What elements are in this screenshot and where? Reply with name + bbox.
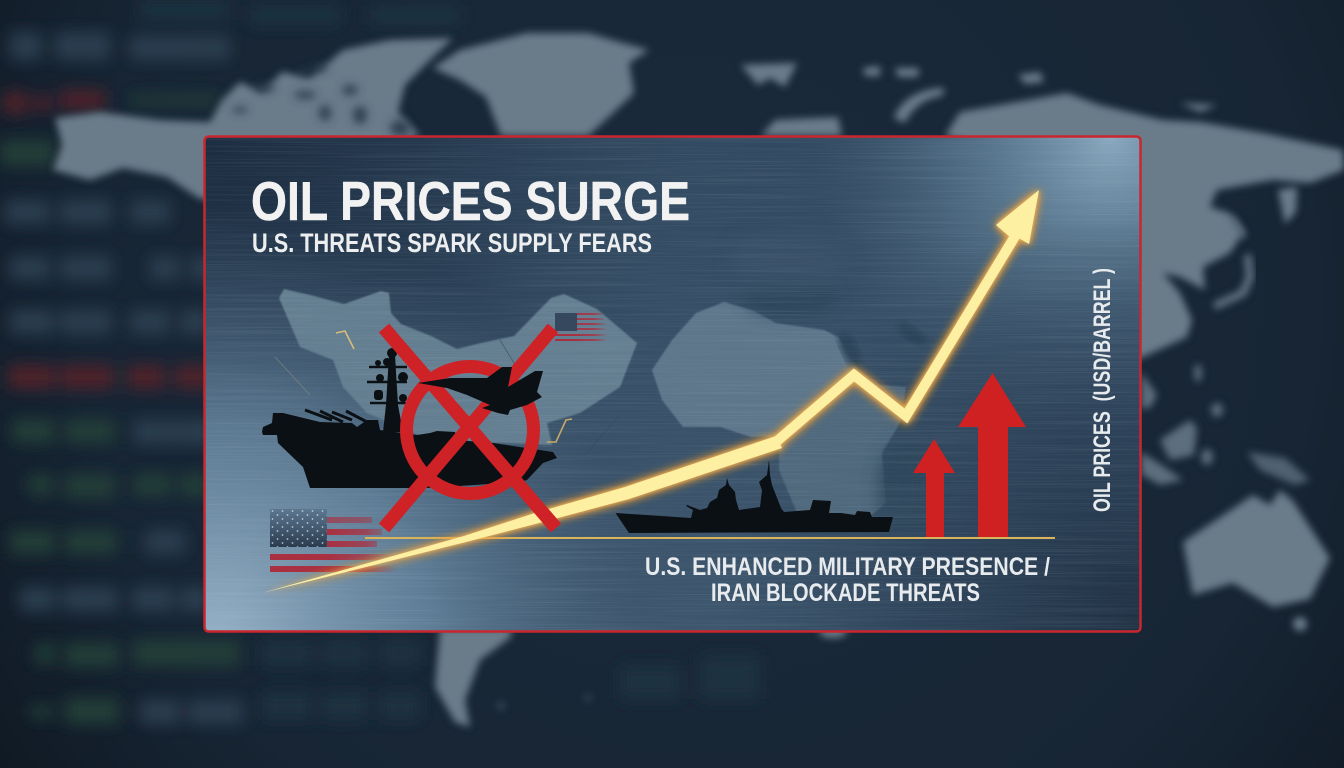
chart: oil price arrow line (262, 190, 1039, 593)
icon: small US flag (555, 313, 607, 341)
axis caption: U.S. ENHANCED MILITARY PRESENCE / (645, 553, 1050, 581)
land: thin blurred islands (1194, 220, 1250, 465)
land: Greenland (433, 33, 649, 136)
main panel (204, 136, 1141, 632)
land: North America (53, 38, 453, 200)
icon: large US flag (270, 509, 397, 572)
panel red border (204, 136, 1140, 632)
icon: warship silhouette (616, 460, 893, 533)
icon: aircraft carrier silhouette (262, 348, 557, 488)
land: South America tip (435, 628, 511, 727)
icon: small red up arrow (913, 439, 955, 537)
subtitle: U.S. THREATS SPARK SUPPLY FEARS (252, 228, 652, 258)
background: blurred stock ticker table (0, 0, 760, 724)
axis line (365, 537, 1055, 539)
axis caption (645, 553, 1050, 607)
land: Kamchatka, Iceland and Arctic islands (741, 63, 1297, 224)
thin route marks (275, 331, 620, 455)
land: Australia (1183, 490, 1330, 607)
icon: large red up arrow (958, 373, 1026, 537)
axis caption: IRAN BLOCKADE THREATS (711, 579, 980, 607)
land: Canadian archipelago channels (232, 64, 410, 136)
land: Europe and Asia (761, 93, 1344, 360)
map: Iran region (279, 289, 637, 445)
icon: fighter jet silhouette (418, 367, 543, 415)
panel background: brushed metal (204, 136, 1141, 632)
map: Africa and Middle East (652, 294, 925, 516)
y axis label: OIL PRICES (USD/BARREL ) (1089, 268, 1116, 512)
land: Southeast Asia islands (1141, 372, 1197, 485)
brushed texture (204, 136, 1141, 632)
title: OIL PRICES SURGE (251, 170, 690, 232)
icon: red prohibition circle and cross (384, 328, 556, 528)
